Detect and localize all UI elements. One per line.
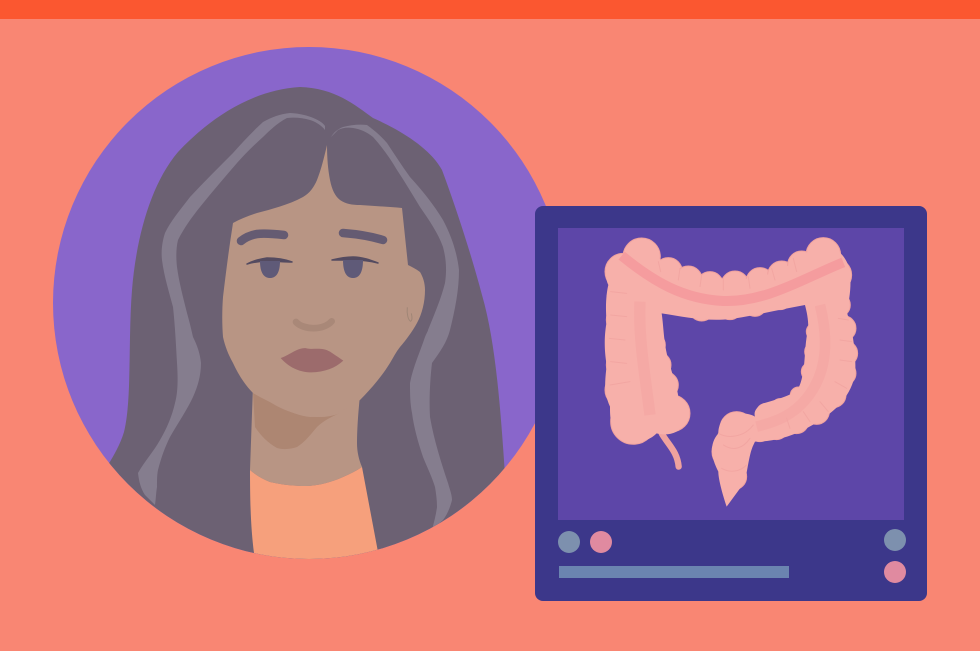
- face: [222, 145, 425, 417]
- progress bar: [559, 566, 789, 578]
- lips: [281, 348, 343, 372]
- control dot pink left: [590, 531, 612, 553]
- screen: [558, 228, 904, 520]
- appendix: [662, 433, 679, 467]
- monitor frame: [535, 206, 927, 601]
- hair highlight left: [138, 113, 325, 505]
- control dot blue left: [558, 531, 580, 553]
- shirt: [250, 467, 378, 565]
- monitor panel: [535, 206, 927, 601]
- portrait: woman in purple circle: [53, 47, 565, 570]
- top orange bar: [0, 0, 980, 19]
- taenia band: [622, 256, 843, 301]
- hair: [109, 87, 504, 559]
- neck: [250, 385, 362, 486]
- ascending colon band: [640, 302, 650, 415]
- nose: [296, 321, 332, 328]
- colon body: [605, 245, 855, 507]
- inner fold lines: [609, 258, 852, 471]
- descending colon band: [757, 305, 825, 427]
- control dot pink right: [884, 561, 906, 583]
- purple circle: [53, 47, 565, 559]
- eye right: [332, 257, 378, 278]
- control dot blue right: [884, 529, 906, 551]
- eyebrow left: [241, 234, 284, 241]
- hair highlight right: [331, 125, 459, 530]
- eye left: [247, 258, 292, 278]
- eyebrow right: [343, 233, 383, 240]
- neck shadow: [253, 392, 340, 449]
- colon illustration: [605, 238, 858, 507]
- ear detail: [407, 307, 412, 321]
- colon lobes: [605, 238, 858, 490]
